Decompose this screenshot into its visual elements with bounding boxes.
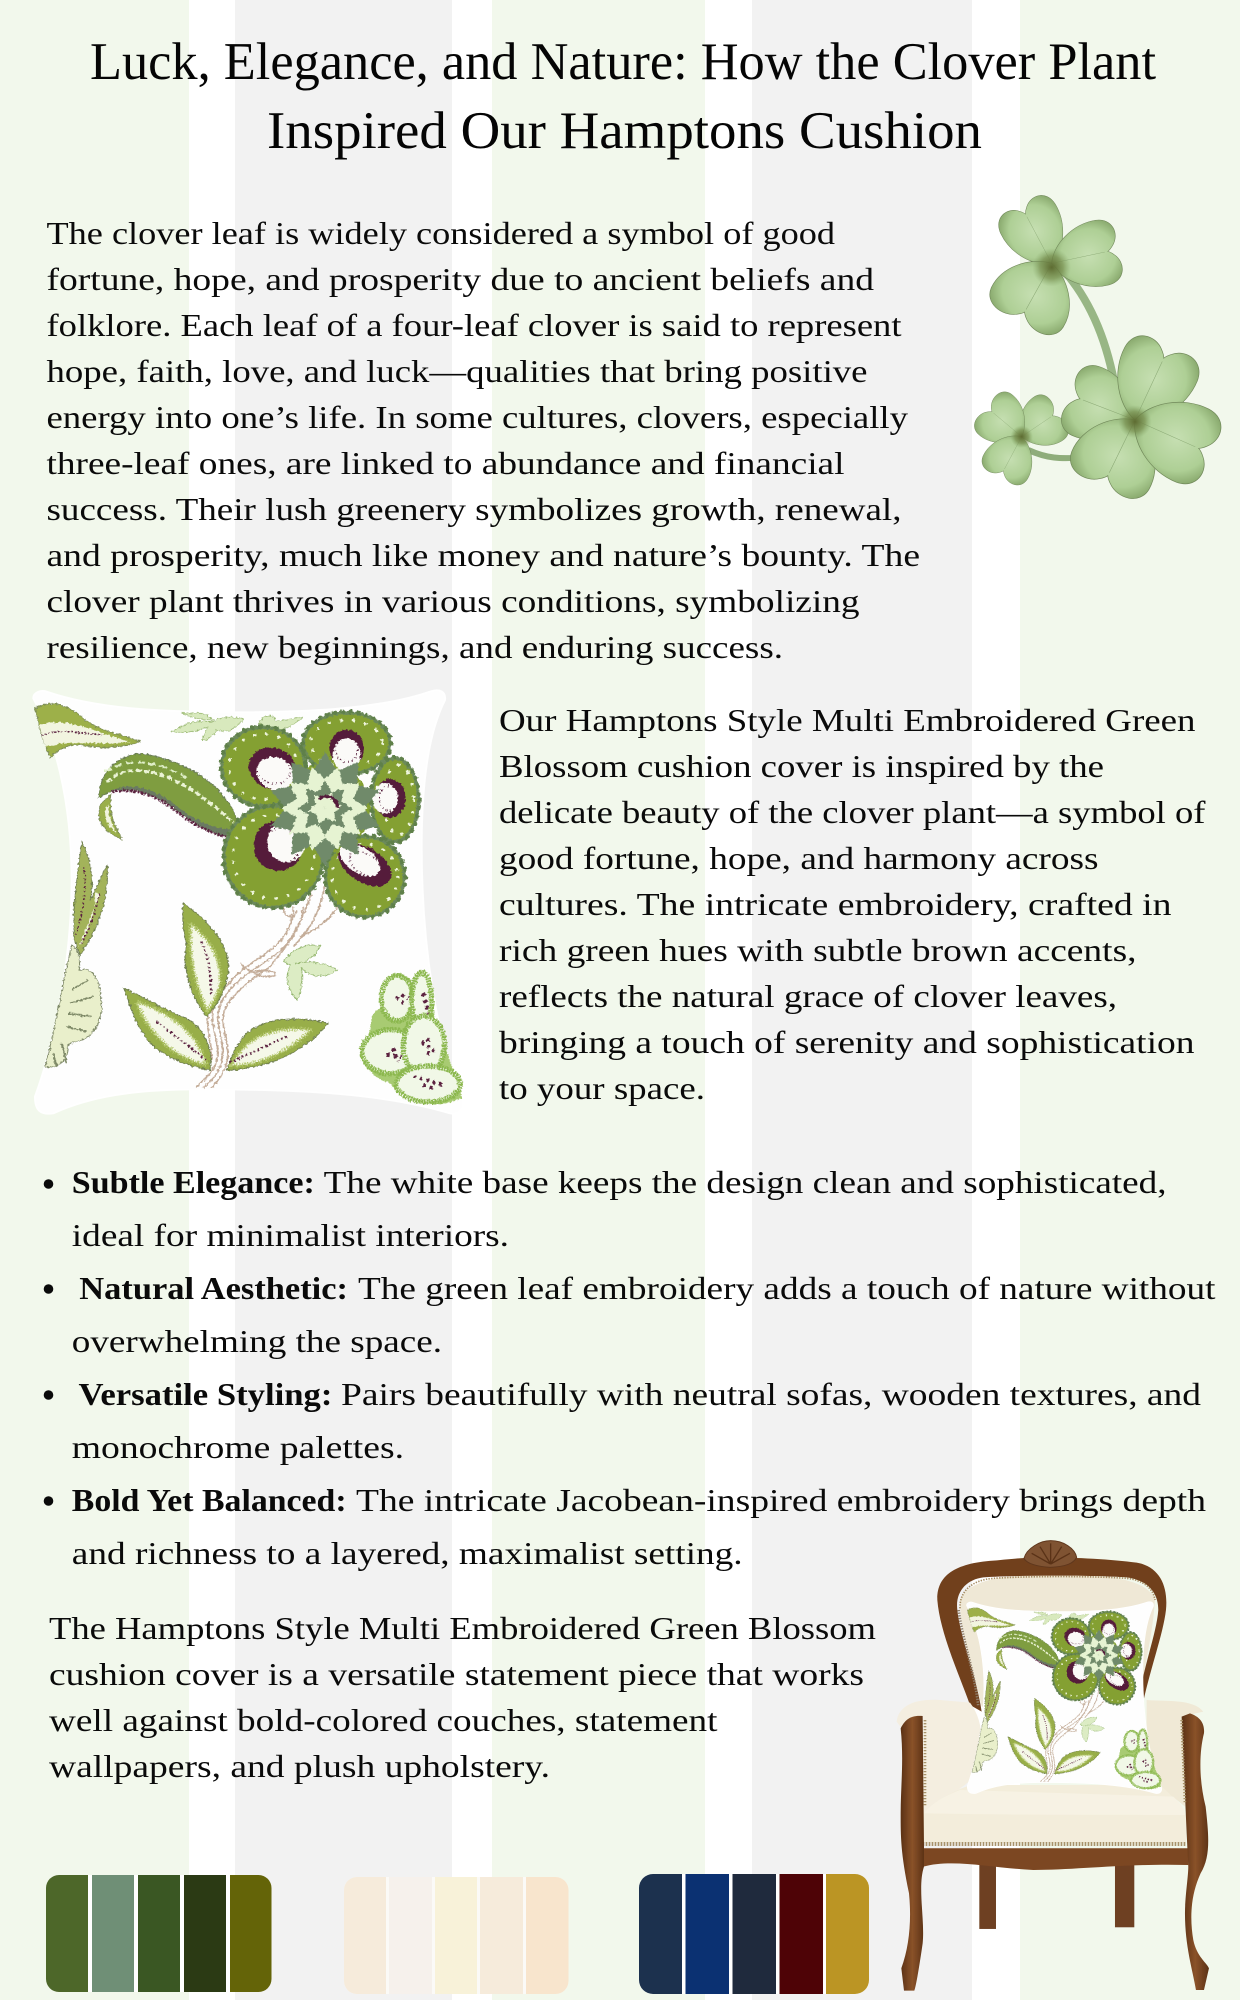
bullet: natural aesthetic: Natural Aesthetic: [79,1270,348,1306]
intro paragraph about clover symbolism: hope, faith, love, and luck—qualities that bring positive [46,353,868,389]
colour palette: creams [344,1877,569,1994]
bullet: subtle elegance: Subtle Elegance: [72,1164,315,1200]
bullet: natural aesthetic [44,1270,1216,1359]
cushion on chair [967,1602,1162,1793]
bullet: subtle elegance [44,1164,1167,1253]
carved shell crest [1024,1541,1077,1567]
paragraph about the cushion cover: reflects the natural grace of clover leaves, [499,978,1117,1014]
intro paragraph about clover symbolism: folklore. Each leaf of a four-leaf clover is said to represent [46,307,902,343]
paragraph about the cushion cover: delicate beauty of the clover plant—a symbol of [499,794,1206,830]
image: wooden armchair with cushion [897,1541,1209,1991]
bullet: versatile styling: Pairs beautifully with neutral sofas, wooden textures, and [341,1376,1201,1412]
chair back upholstery [960,1575,1155,1707]
intro paragraph about clover symbolism: three-leaf ones, are linked to abundance and financial [46,445,845,481]
title: Inspired Our Hamptons Cushion [267,102,982,160]
paragraph about the cushion cover: Blossom cushion cover is inspired by the [499,748,1104,784]
closing paragraph [49,1610,876,1784]
bullet: natural aesthetic: The green leaf embroidery adds a touch of nature without [358,1270,1216,1306]
closing paragraph: cushion cover is a versatile statement piece that works [49,1656,864,1692]
bullet: bold yet balanced: The intricate Jacobean-inspired embroidery brings depth [356,1482,1206,1518]
bullet: versatile styling: monochrome palettes. [72,1429,404,1465]
intro paragraph about clover symbolism: clover plant thrives in various conditions, symbolizing [46,583,860,619]
intro paragraph about clover symbolism [46,215,920,665]
intro paragraph about clover symbolism: The clover leaf is widely considered a symbol of good [46,215,835,251]
title [90,33,1156,160]
closing paragraph: wallpapers, and plush upholstery. [49,1748,550,1784]
chair back frame [937,1557,1166,1712]
bullet: versatile styling: Versatile Styling: [78,1376,332,1412]
title: Luck, Elegance, and Nature: How the Clover Plant [90,33,1156,91]
image: embroidered cushion [33,690,463,1114]
paragraph about the cushion cover: cultures. The intricate embroidery, crafted in [499,886,1172,922]
chair arms [897,1700,982,1813]
closing paragraph: well against bold-colored couches, statement [49,1702,718,1738]
bullet: subtle elegance: The white base keeps the design clean and sophisticated, [324,1164,1166,1200]
paragraph about the cushion cover: rich green hues with subtle brown accents, [499,932,1136,968]
intro paragraph about clover symbolism: energy into one’s life. In some cultures, clovers, especially [46,399,908,435]
closing paragraph: The Hamptons Style Multi Embroidered Green Blossom [49,1610,876,1646]
bullet list of features [44,1164,1216,1571]
paragraph about the cushion cover: bringing a touch of serenity and sophistication [499,1024,1194,1060]
intro paragraph about clover symbolism: success. Their lush greenery symbolizes growth, renewal, [46,491,901,527]
chair front rail [922,1848,1188,1870]
bullet: versatile styling [44,1376,1201,1465]
intro paragraph about clover symbolism: fortune, hope, and prosperity due to ancient beliefs and [46,261,874,297]
chair left post and leg [901,1716,924,1991]
bullet: natural aesthetic: overwhelming the space. [72,1323,442,1359]
bullet: bold yet balanced [44,1482,1206,1571]
paragraph about the cushion cover: Our Hamptons Style Multi Embroidered Green [499,702,1196,738]
paragraph about the cushion cover: good fortune, hope, and harmony across [499,840,1098,876]
chair back legs [979,1863,1134,1929]
chair right post and leg [1182,1713,1209,1990]
paragraph about the cushion cover: to your space. [499,1070,705,1106]
intro paragraph about clover symbolism: and prosperity, much like money and nature’s bounty. The [46,537,920,573]
illustration: watercolor clover sprigs [970,190,1227,505]
colour palette: greens [46,1875,272,1992]
bullet: bold yet balanced: Bold Yet Balanced: [72,1482,347,1518]
colour palette: navy and gold [639,1874,869,1994]
chair seat cushion [923,1785,1186,1843]
paragraph about the cushion cover [499,702,1206,1106]
bullet: bold yet balanced: and richness to a layered, maximalist setting. [72,1535,743,1571]
intro paragraph about clover symbolism: resilience, new beginnings, and enduring success. [46,629,783,665]
bullet: subtle elegance: ideal for minimalist interiors. [72,1217,509,1253]
